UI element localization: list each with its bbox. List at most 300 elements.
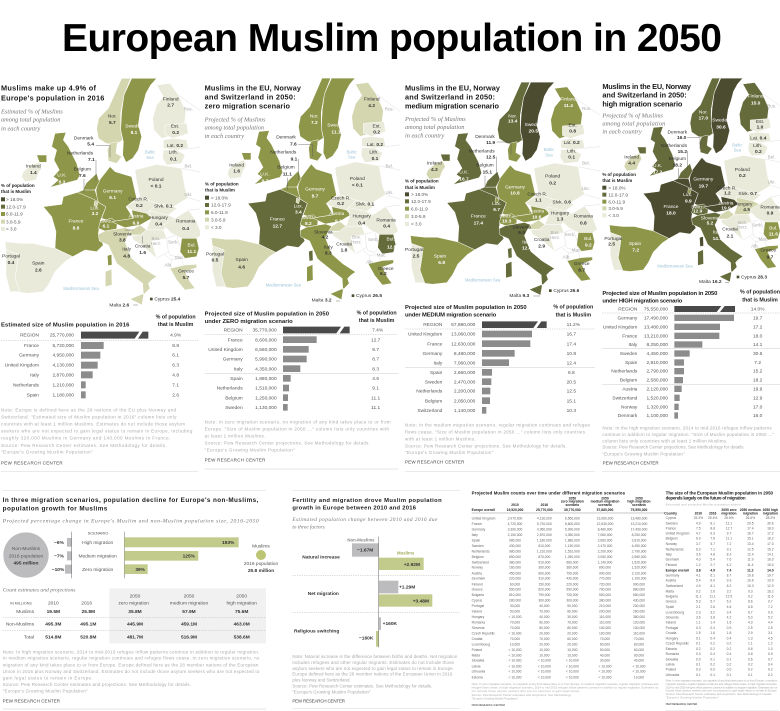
map labels: Germany: [505, 185, 525, 190]
table rows: 4.1: [696, 574, 701, 578]
map labels: 18.2: [673, 163, 682, 169]
table rows: Italy: [472, 533, 478, 537]
bar labels: Switzerland: [417, 408, 443, 414]
decline bars: −10%: [52, 567, 65, 573]
table rows: 0.6: [748, 657, 753, 661]
table rows: Europe overall: [472, 508, 495, 512]
table header: medium migration: [591, 500, 619, 504]
table rows: 100,000: [599, 631, 611, 635]
table rows: Hungary: [666, 636, 679, 640]
table rows: 3.2: [710, 610, 715, 614]
map labels: 19.9: [721, 205, 731, 211]
table rows: 19,520,000: [507, 508, 523, 512]
map labels: Ukr.: [385, 190, 393, 195]
table rows: 4.7: [696, 532, 701, 536]
table header: scenario: [565, 503, 579, 507]
map labels: Austria: [718, 201, 734, 206]
map labels: 0.8: [569, 128, 576, 134]
map labels: [604, 94, 780, 269]
bar labels: Spain: [625, 360, 638, 366]
heading: Europe's population in 2016: [1, 94, 104, 103]
map labels: Germany: [693, 178, 713, 183]
table rows: 28.3%: [766, 516, 775, 520]
source: PEW RESEARCH CENTER: [205, 458, 266, 463]
table rows: 6.7: [748, 610, 753, 614]
table: counts: 495.3M: [45, 622, 61, 628]
table: counts: IN MILLIONS: [10, 601, 32, 605]
subtitle: [204, 117, 266, 140]
table rows: 4,130,000: [537, 517, 552, 521]
map labels: Alb.: [164, 263, 172, 268]
bar labels: Switzerland: [612, 395, 638, 401]
table rows: Romania: [472, 620, 485, 624]
map labels: Netherlands: [67, 151, 93, 156]
map labels: 7.2: [632, 248, 639, 254]
source: PEW RESEARCH CENTER: [292, 699, 346, 704]
table rows: < 10,000: [538, 670, 551, 674]
map labels: Lat. 0.4: [750, 135, 767, 141]
table rows: 7.6: [710, 537, 715, 541]
table rows: 1,140,000: [598, 560, 613, 564]
table rows: 2,120,000: [632, 571, 647, 575]
bar labels: 10.3: [567, 408, 576, 414]
legend: that is Muslim: [205, 187, 235, 192]
map labels: Rus.: [582, 106, 591, 111]
table rows: 35,770,000: [564, 508, 581, 512]
map labels: 9.7: [262, 178, 269, 184]
bar labels: [408, 322, 581, 414]
map labels: 6.1: [109, 195, 116, 201]
note: with at least 1 million Muslims.: [405, 436, 476, 441]
table rows: Slovakia: [666, 657, 678, 661]
scenario labels: Zero migration: [82, 567, 114, 573]
callout: Cyprus: Cyprus 26.6: [553, 288, 580, 294]
heading: and Switzerland in 2050:: [205, 92, 296, 101]
table rows: 600,000: [538, 571, 550, 575]
bar labels: 7.1: [172, 382, 179, 388]
table rows: 4.4: [768, 621, 773, 625]
note: roughly 320,000 Muslims in Germany and 140,000 Muslims in France.: [1, 436, 170, 441]
map labels: Germany: [103, 189, 123, 194]
callout: Malta: [109, 302, 138, 308]
map labels: Finland: [560, 97, 576, 102]
decline bars: [52, 538, 72, 574]
map labels: Lux.: [683, 193, 692, 198]
bar labels: 15.1: [567, 398, 576, 404]
map labels: Ukr.: [768, 179, 776, 184]
bar labels: 6.8: [568, 370, 575, 376]
table rows: 15.0: [767, 563, 774, 567]
heading: In three migration scenarios, population decline for Europe's non-Muslims,: [3, 497, 259, 504]
table rows: Latvia: [666, 663, 675, 667]
table rows: 1,210,000: [537, 549, 552, 553]
map labels: 11.1: [283, 171, 292, 177]
map labels: [405, 96, 593, 283]
table rows: 12,630,000: [597, 522, 613, 526]
map labels: Croatia: [336, 242, 352, 247]
legend: < 3.0: [608, 213, 619, 218]
map labels: Serb.: [752, 223, 763, 228]
map labels: 1.0: [757, 124, 764, 130]
table rows: 7,060,000: [598, 533, 613, 537]
heading: Projected Muslim counts over time under different migration scenarios: [472, 490, 626, 495]
table rows: 3,300,000: [508, 527, 523, 531]
subtitle: to three factors: [292, 523, 325, 530]
table rows: 0.1: [696, 642, 701, 646]
subtitle: Projected % of Muslims: [204, 117, 266, 124]
bar labels: Belgium: [225, 395, 243, 401]
table rows: 1.6: [727, 621, 731, 625]
table rows: 10,000: [539, 653, 550, 657]
table rows: 0.4: [768, 663, 773, 667]
note: [602, 426, 774, 456]
table header: 2050 high: [763, 508, 778, 512]
table rows: 0.2: [727, 642, 731, 646]
table rows: 120,000: [633, 620, 645, 624]
circle: non-Muslims: Non-Muslims: [12, 546, 41, 552]
map labels: Austria: [529, 209, 544, 214]
legend: 12.0-17.9: [6, 204, 26, 209]
table rows: 5.0: [748, 615, 753, 619]
map labels: 16.7: [459, 176, 469, 182]
map labels: 4.5: [743, 207, 750, 213]
table rows: 10,000: [634, 675, 644, 679]
table rows: Hungary: [472, 615, 485, 619]
map labels: Austria: [329, 212, 344, 217]
map labels: 3.4: [295, 210, 302, 216]
table rows: 60,000: [600, 642, 610, 646]
note: 2014 to mid-2016 refugee inflow patterns continue in addition to regular migration. Estimates do not: [666, 685, 778, 689]
table header: [664, 508, 778, 515]
table rows: 2,870,000: [537, 533, 552, 537]
note: Europe. "Size of Muslim population in 2050 ..." column lists only countries with: [205, 427, 389, 432]
table rows: 3.8: [696, 568, 701, 572]
map labels: Bel.: [582, 160, 590, 165]
table: counts: 514.8M: [45, 634, 61, 640]
chart: net migration: +3.48M: [413, 598, 429, 604]
heading: and Switzerland in 2050:: [405, 92, 495, 101]
bar chart: zero migration: [205, 311, 398, 469]
table header: scenario: [598, 503, 612, 507]
table rows: 9.7: [768, 600, 773, 604]
note: Note: In zero migration scenario, no migration of any kind takes place to or from Europe. In medium: [666, 679, 778, 683]
table rows: 20,000: [539, 631, 550, 635]
table rows: Greece: [472, 588, 483, 592]
map labels: [206, 96, 397, 288]
map labels: Romania: [176, 219, 195, 224]
note: include those asylum seekers who are not expected to gain legal status to remain in Europe.: [666, 689, 778, 693]
bar labels: 1,210,000: [53, 382, 74, 388]
table rows: Slovenia: [666, 615, 679, 619]
map labels: 9.1: [291, 156, 298, 162]
scenario labels: High migration: [82, 540, 114, 546]
table: counts: 25.8M: [82, 609, 95, 615]
table rows: 430,000: [566, 577, 578, 581]
map labels: 0.4: [182, 226, 189, 232]
legend: 3.0-5.9: [6, 219, 21, 224]
heading: Muslims in the EU, Norway: [405, 83, 501, 92]
table rows: 590,000: [509, 588, 521, 592]
map labels: 0.2: [136, 203, 143, 209]
note: Source: Pew Research Center estimates. See Methodology for details.: [292, 684, 432, 689]
map labels: Herz.: [351, 239, 362, 244]
table rows: 2,790,000: [632, 549, 647, 553]
map labels: < 0.1: [352, 183, 363, 189]
map labels: Lux.: [492, 202, 501, 207]
bar labels: 14.1: [753, 342, 763, 348]
leader lines: [485, 142, 511, 188]
map labels: 0.2: [739, 173, 746, 179]
table header: scenario: [632, 503, 646, 507]
legend: 3.0-5.9: [411, 214, 426, 219]
column heading: % of population: [553, 305, 593, 311]
table rows: 0.3: [696, 652, 701, 656]
table rows: 0.8: [748, 647, 753, 651]
legend: 6.0-11.9: [411, 206, 428, 211]
table rows: < 10,000: [508, 664, 522, 668]
bar labels: 19.7: [753, 315, 763, 321]
table rows: 13.4: [747, 542, 754, 546]
heading: Muslims in the EU, Norway: [602, 82, 692, 91]
table rows: 17,490,000: [631, 527, 647, 531]
table rows: 6.2: [727, 600, 731, 604]
table rows: 0.8: [748, 652, 753, 656]
map labels: 4.2: [368, 103, 375, 109]
map labels: Sweden: [327, 124, 345, 129]
table rows: 9.9: [768, 610, 773, 614]
map labels: Poland: [350, 177, 365, 182]
table: counts: 19.5M: [47, 609, 60, 615]
table rows: 310,000: [538, 577, 550, 581]
map labels: 12.5: [387, 244, 397, 250]
note: "Europe's Growing Muslim Population": [472, 697, 518, 701]
chart heading: Projected size of Muslim population in 2050: [602, 291, 717, 297]
note: countries with at least 1 million Muslims. Estimates do not include those asylum: [1, 421, 185, 426]
table rows: 2,810,000: [632, 538, 647, 542]
map labels: Slovenia: [314, 230, 333, 235]
bar labels: 2,120,000: [647, 386, 668, 392]
map labels: Baltic: [732, 143, 742, 148]
heading: medium migration scenario: [405, 101, 500, 110]
table rows: 10.6: [747, 579, 754, 583]
table rows: 0.4: [710, 636, 715, 640]
table rows: 0.1: [696, 673, 701, 677]
chart: religious switching: [294, 617, 398, 647]
table rows: 4.2: [727, 615, 731, 619]
table rows: Austria: [472, 571, 482, 575]
table rows: Romania: [666, 652, 679, 656]
map labels: Croatia: [534, 238, 549, 243]
table rows: 980,000: [509, 549, 521, 553]
table rows: Denmark: [472, 577, 486, 581]
map labels: 12.9: [693, 209, 703, 215]
map labels: U.K.: [653, 164, 662, 169]
table rows: 300,000: [566, 599, 578, 603]
heading: and Switzerland in 2050:: [602, 91, 687, 100]
subtitle: in each country: [405, 132, 445, 139]
bar labels: 17.4: [567, 341, 576, 347]
note: "Europe's Growing Muslim Population": [1, 450, 93, 455]
bar labels: Germany: [223, 357, 243, 363]
note: includes refugees and other regular migrants. Estimates do not include those: [292, 660, 454, 665]
table rows: 10.3: [747, 584, 754, 588]
subtitle: [404, 116, 466, 139]
map labels: 8.7: [578, 268, 585, 274]
bar labels: France: [228, 337, 243, 343]
scenario labels: [78, 531, 117, 573]
map labels: Switz.: [691, 205, 704, 210]
map labels: 1.1: [535, 198, 542, 204]
table rows: 8,250,000: [632, 533, 647, 537]
map labels: 12.5: [486, 154, 496, 160]
bar labels: 2,660,000: [454, 370, 476, 376]
table rows: 40,000: [539, 615, 550, 619]
bar labels: Spain: [27, 392, 39, 398]
map labels: Greece: [178, 269, 194, 274]
table rows: 1.5: [696, 631, 701, 635]
source: PEW RESEARCH CENTER: [405, 460, 465, 465]
table: counts: 463.0M: [234, 622, 250, 628]
heading: Muslims make up 4.9% of: [1, 84, 97, 93]
table rows: 7.4: [727, 568, 731, 572]
country bars: [482, 331, 532, 414]
map labels: 18.0: [666, 211, 676, 217]
bar labels: 12.5: [567, 389, 576, 395]
note: Source: Pew Research Center projections. See Methodology for details.: [602, 445, 745, 450]
table rows: 110,000: [633, 631, 645, 635]
table rows: 2,970,000: [508, 517, 523, 521]
table rows: 7.2: [768, 605, 773, 609]
column heading: [553, 305, 593, 318]
table rows: Denmark: [666, 558, 680, 562]
table rows: Finland: [666, 563, 677, 567]
map labels: Ireland: [229, 163, 244, 168]
map labels: Ireland: [624, 155, 639, 160]
panel: zero migration map: [204, 78, 403, 304]
map labels: 30.6: [716, 124, 726, 130]
note: Source: Pew Research Center estimates and projections. See Methodology.: [472, 693, 572, 697]
map labels: Portugal: [206, 252, 224, 257]
column heading: that is Muslim: [158, 322, 194, 328]
map labels: Denmark: [276, 136, 296, 141]
callout: Malta: Malta 3.2: [312, 298, 332, 304]
table rows: 1,880,000: [565, 538, 580, 542]
table rows: 4.0: [696, 558, 701, 562]
bar labels: 17.2: [753, 324, 763, 330]
table rows: 11.1: [710, 594, 716, 598]
note: Source: Pew Research Center projections. See Methodology for details.: [405, 443, 567, 448]
bar labels: 75,550,000: [644, 307, 668, 313]
legend: > 18.0%: [211, 195, 228, 200]
note: Union in 2016 plus Norway and Switzerland. Estimates do not include those asylum seekers who are not expected to: [3, 669, 260, 674]
table rows: 25,770,000: [536, 508, 553, 512]
table rows: 12.4: [747, 552, 754, 556]
map labels: 5.7: [109, 120, 116, 126]
table rows: 2.3: [696, 610, 701, 614]
map labels: Sweden: [712, 119, 730, 124]
bar labels: 8.3: [372, 366, 379, 372]
bar labels: United Kingdom: [5, 363, 39, 369]
table rows: 10,000: [539, 648, 550, 652]
note: gain legal status to remain in Europe.: [3, 676, 93, 681]
subtitle: among total population: [405, 124, 464, 131]
bar labels: 11.1: [371, 405, 380, 411]
table rows: Lithuania: [666, 673, 679, 677]
region bar: [81, 332, 148, 339]
table header: 2050: [569, 496, 576, 500]
heading: zero migration scenario: [205, 102, 291, 111]
bar labels: 2.6: [172, 392, 179, 398]
chart heading: Projected size of Muslim population in 2050: [405, 305, 527, 311]
note: migration of any kind takes place to or from Europe. Europe defined here as the 28 member nations of the European: [3, 662, 259, 667]
bar labels: Netherlands: [611, 369, 638, 375]
map labels: Nor.: [508, 115, 517, 120]
callout: Malta: Malta 9.3: [509, 293, 530, 299]
table rows: 70,000: [510, 637, 520, 641]
table rows: 3.4: [727, 610, 731, 614]
bar labels: Spain: [230, 376, 243, 382]
map labels: Czech R.: [331, 196, 351, 201]
map labels: Lith.: [369, 150, 379, 155]
region bar: [674, 306, 735, 312]
bar labels: 14.0%: [751, 307, 765, 313]
table rows: 4.8: [710, 552, 715, 556]
table rows: France: [472, 522, 482, 526]
table rows: 70,000: [510, 620, 520, 624]
map labels: 6.9: [133, 221, 140, 227]
table rows: 13,480,000: [631, 517, 647, 521]
table rows: Germany: [666, 574, 680, 578]
map labels: 0.4: [8, 260, 15, 266]
table rows: 16.7: [747, 532, 754, 536]
table header: Country: [664, 511, 677, 515]
map labels: 5.0: [518, 230, 525, 236]
bar labels: 25,770,000: [50, 333, 74, 339]
heading: Muslims in the EU, Norway: [205, 83, 302, 92]
table rows: 0.4: [710, 626, 715, 630]
table rows: Bulgaria: [472, 593, 484, 597]
table rows: 70,000: [539, 610, 550, 614]
table rows: Latvia: [472, 664, 481, 668]
map labels: Lat. 0.2: [564, 140, 580, 146]
table rows: 3.1: [768, 631, 773, 635]
note: Source: Pew Research Center projections. See Methodology for details.: [205, 441, 370, 446]
map labels: 12.4: [522, 246, 532, 252]
table rows: 100,000: [633, 626, 645, 630]
table rows: [666, 516, 775, 677]
legend: % of population: [205, 181, 239, 186]
table rows: 0.4: [710, 652, 715, 656]
table rows: 0.2: [727, 663, 731, 667]
subtitle: in each country: [1, 125, 41, 132]
table rows: United Kingdom: [472, 517, 496, 521]
subtitle: [601, 113, 665, 136]
bar labels: REGION: [20, 333, 40, 339]
bar labels: 15.2: [753, 369, 763, 375]
table header: [511, 496, 651, 507]
scenario labels: SCENARIO: [88, 531, 108, 536]
table rows: 5.3: [696, 600, 701, 604]
heading: [3, 497, 259, 513]
table rows: 0.1: [710, 657, 715, 661]
callout: Malta: [699, 279, 729, 285]
growth bars: 125%: [183, 554, 196, 560]
column heading: that is Muslim: [556, 312, 591, 318]
table rows: 8.2: [727, 584, 731, 588]
table rows: 10,000: [510, 642, 520, 646]
map labels: 1.6: [233, 169, 240, 175]
table rows: Belgium: [666, 537, 678, 541]
